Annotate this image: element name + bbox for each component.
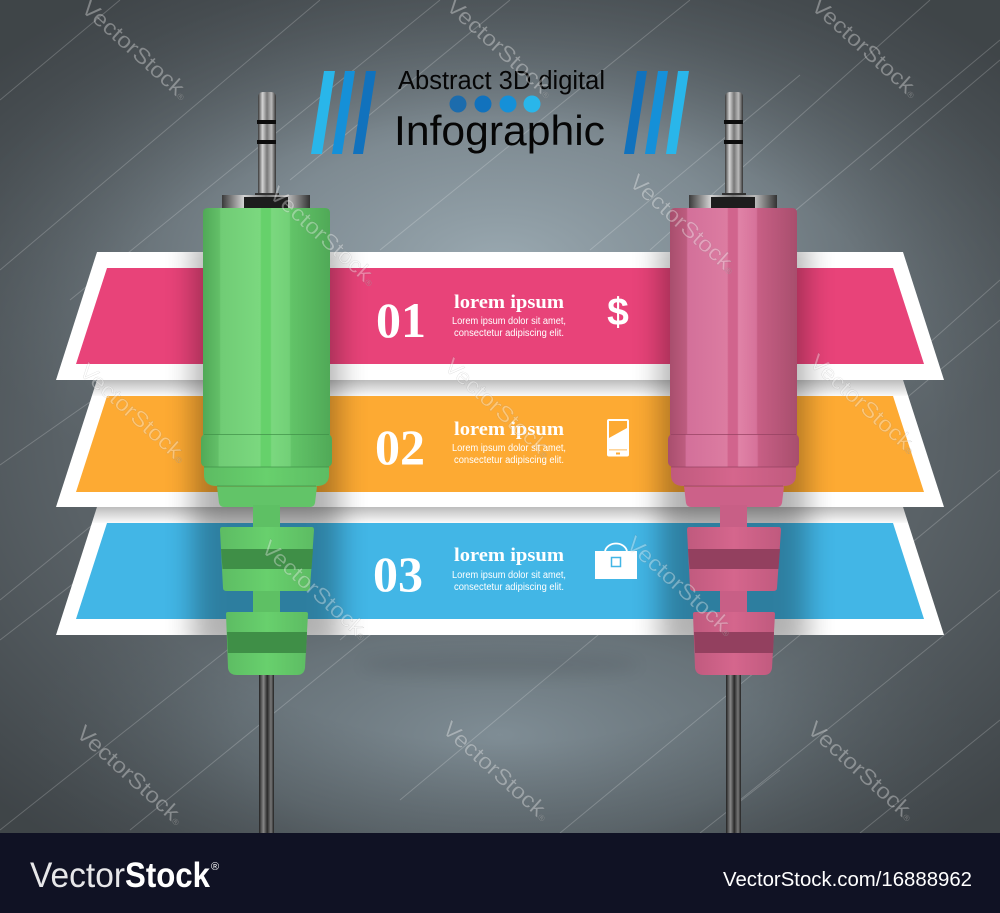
neck bbox=[217, 486, 317, 507]
metal collar bbox=[689, 195, 777, 209]
band 3: blue bbox=[56, 507, 944, 635]
body bbox=[670, 208, 797, 436]
VectorStock watermarks: VectorStock ® bbox=[257, 535, 375, 645]
metal pin bbox=[722, 92, 746, 198]
collar separators bbox=[204, 434, 329, 486]
row 02 description: Lorem ipsum dolor sit amet, bbox=[452, 443, 566, 454]
lower collar bbox=[204, 467, 329, 486]
icon: dollar: $ bbox=[607, 291, 629, 334]
strain relief ring 1 bbox=[687, 527, 781, 591]
jack shadows on bands bbox=[193, 235, 807, 655]
four dots bbox=[450, 96, 540, 112]
VectorStock watermarks: VectorStock ® bbox=[625, 169, 743, 279]
band 2: orange bbox=[56, 380, 944, 507]
icon: phone bbox=[607, 419, 629, 456]
VectorStock watermarks: VectorStock ® bbox=[440, 353, 558, 463]
VectorStock watermarks: VectorStock ® bbox=[438, 716, 556, 826]
row 03 content bbox=[373, 544, 637, 602]
grip collar bbox=[201, 434, 332, 467]
VectorStock watermarks: VectorStock ® bbox=[265, 181, 383, 291]
row 02 description: consectetur adipiscing elit. bbox=[454, 455, 564, 466]
number 03: 03 bbox=[373, 546, 423, 602]
title line two: Infographic bbox=[394, 107, 605, 154]
VectorStock watermarks: VectorStock ® bbox=[75, 358, 193, 468]
VectorStock watermarks: VectorStock ® bbox=[622, 531, 740, 641]
pink audio jack bbox=[668, 92, 799, 833]
collar separators bbox=[671, 434, 796, 486]
row 01 description: consectetur adipiscing elit. bbox=[454, 328, 564, 339]
stems bbox=[253, 505, 280, 529]
footer logo: ® bbox=[211, 861, 219, 873]
icon: briefcase bbox=[595, 544, 637, 579]
row 02 content bbox=[375, 419, 629, 475]
strain relief ring 2 bbox=[226, 612, 308, 675]
metal pin bbox=[255, 92, 279, 198]
row 03 description: Lorem ipsum dolor sit amet, bbox=[452, 570, 566, 581]
cord bbox=[726, 672, 741, 833]
row 02 heading: lorem ipsum bbox=[454, 419, 564, 440]
lower collar bbox=[671, 467, 796, 486]
strain relief ring 2 bbox=[693, 612, 775, 675]
number 01: 01 bbox=[376, 292, 426, 348]
stems bbox=[720, 505, 747, 529]
row 02 description bbox=[452, 443, 566, 466]
cord bbox=[259, 672, 274, 833]
row 01 description bbox=[452, 316, 566, 339]
grip collar bbox=[668, 434, 799, 467]
strain relief ring 1 bbox=[220, 527, 314, 591]
title line one: Abstract 3D digital bbox=[398, 67, 605, 95]
VectorStock watermarks: VectorStock ® bbox=[803, 716, 921, 826]
footer logo bbox=[30, 856, 219, 895]
row 03 description: consectetur adipiscing elit. bbox=[454, 582, 564, 593]
body bbox=[203, 208, 330, 436]
band cast shadows bbox=[90, 380, 910, 523]
row 01 description: Lorem ipsum dolor sit amet, bbox=[452, 316, 566, 327]
row 01 heading: lorem ipsum bbox=[454, 292, 564, 313]
footer banner bbox=[0, 833, 1000, 913]
band 1: pink bbox=[56, 252, 944, 380]
VectorStock watermarks: VectorStock ® bbox=[805, 349, 923, 459]
left blue stripes bbox=[311, 71, 376, 154]
VectorStock watermarks: VectorStock ® bbox=[72, 720, 190, 830]
footer url: VectorStock.com/16888962 bbox=[723, 869, 972, 891]
row 03 heading: lorem ipsum bbox=[454, 545, 564, 566]
row 03 description bbox=[452, 570, 566, 593]
number 02: 02 bbox=[375, 419, 425, 475]
footer logo: Vector bbox=[30, 856, 125, 895]
neck bbox=[684, 486, 784, 507]
VectorStock watermarks bbox=[72, 0, 925, 830]
row 01 content bbox=[376, 291, 629, 348]
footer logo: Stock bbox=[125, 856, 210, 895]
metal collar bbox=[222, 195, 310, 209]
title group bbox=[311, 67, 689, 154]
right blue stripes bbox=[624, 71, 689, 154]
green audio jack bbox=[201, 92, 332, 833]
floor shadow bbox=[360, 653, 640, 677]
